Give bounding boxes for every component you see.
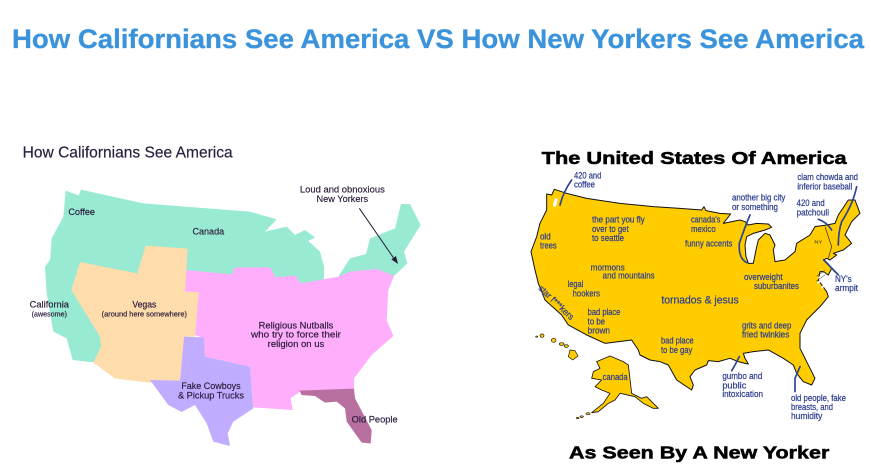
region: Religious Nutballs (185, 267, 394, 410)
panel: the United States as seen by a New Yorker (531, 148, 860, 462)
map labels: right: and mountains (603, 270, 655, 280)
map labels: right: mormons (591, 263, 625, 273)
map labels: right: bad place (588, 307, 620, 317)
map labels: right (537, 170, 858, 421)
map labels: right: old people, fake (791, 393, 846, 403)
map labels: right: star f***kers (537, 283, 577, 322)
map labels: right: or something (732, 202, 778, 212)
map labels: right: over to get (592, 224, 629, 234)
map labels: left: Old People (352, 415, 398, 425)
map labels: left: & Pickup Trucks (178, 390, 244, 400)
map labels: right: the part you fly (592, 215, 645, 225)
heading: left map: How Californians See America (23, 144, 233, 161)
map labels: right: funny accents (685, 239, 733, 249)
map labels: right: overweight (744, 272, 783, 282)
map labels: right: public (722, 380, 747, 390)
map labels: right: legal (568, 279, 583, 289)
map labels: right: clam chowda and (797, 172, 858, 182)
map: Hawaii and Aleutian islands (536, 334, 590, 419)
map labels: left: Loud and obnoxious (300, 185, 385, 195)
map: Alaska (592, 356, 658, 413)
map labels: right: coffee (574, 180, 595, 190)
map labels: right: 420 and (574, 170, 601, 180)
map labels: left: (awesome) (32, 312, 67, 319)
map labels: right: armpit (835, 283, 858, 293)
heading: top right: The United States Of America (542, 148, 848, 168)
map labels: left: California (30, 299, 70, 309)
map labels: right: 420 and (797, 198, 825, 208)
map labels: left: New Yorkers (316, 194, 368, 204)
map labels: right: canada's (691, 215, 721, 225)
region: Fake Cowboys (150, 337, 253, 446)
map labels: right: tornados & jesus (661, 294, 739, 306)
region: California, Canada and New Yorkers (45, 190, 421, 362)
heading: bottom right: As Seen By A New Yorker (569, 442, 829, 462)
map labels: right: bad place (661, 336, 694, 346)
map labels: right: patchouli (797, 207, 829, 217)
map labels: right: brown (588, 325, 610, 335)
map labels: left: religion on us (268, 339, 325, 349)
map labels: right: gumbo and (722, 371, 762, 381)
map labels: left: Canada (192, 226, 225, 236)
region: Old People (299, 389, 372, 443)
New York border, Puget Sound and Chesapeake detail (555, 200, 832, 288)
map labels: right: to seattle (592, 233, 624, 243)
map labels: left: (around here somewhere) (102, 310, 187, 319)
map labels: right: breasts, and (791, 402, 833, 412)
map labels: right: NY's (835, 274, 852, 284)
title: How Californians See America VS How New Yorkers See America (12, 24, 865, 54)
map labels: right: old (540, 231, 551, 241)
map labels: left (30, 185, 398, 425)
map labels: left: Religious Nutballs (259, 320, 334, 330)
map labels: right: inferior baseball (797, 181, 852, 191)
map labels: left: Vegas (132, 299, 157, 309)
map labels: right: suburbanites (754, 281, 799, 291)
map labels: right: another big city (732, 193, 786, 203)
map labels: left: Coffee (68, 207, 95, 217)
map labels: right: to be gay (661, 345, 693, 355)
map labels: right: to be (588, 316, 605, 326)
map labels: right: hookers (573, 288, 600, 298)
map labels: right: mexico (691, 224, 716, 234)
map labels: right: humidity (791, 411, 823, 421)
map labels: right: grits and deep (742, 320, 791, 330)
map labels: left: Fake Cowboys (181, 381, 241, 391)
map labels: right: fried twinkies (742, 329, 790, 339)
map labels: left: who try to force their (250, 330, 341, 340)
map labels: right: NY (814, 239, 822, 244)
map labels: right: canada (603, 372, 628, 382)
map: contiguous US (531, 189, 860, 390)
map labels: right: intoxication (722, 389, 763, 399)
arrow: New Yorkers (359, 208, 398, 264)
pointer lines (560, 180, 857, 392)
panel: how Californians see America (23, 144, 421, 446)
region: Vegas (71, 246, 199, 383)
map labels: right: trees (540, 241, 557, 251)
